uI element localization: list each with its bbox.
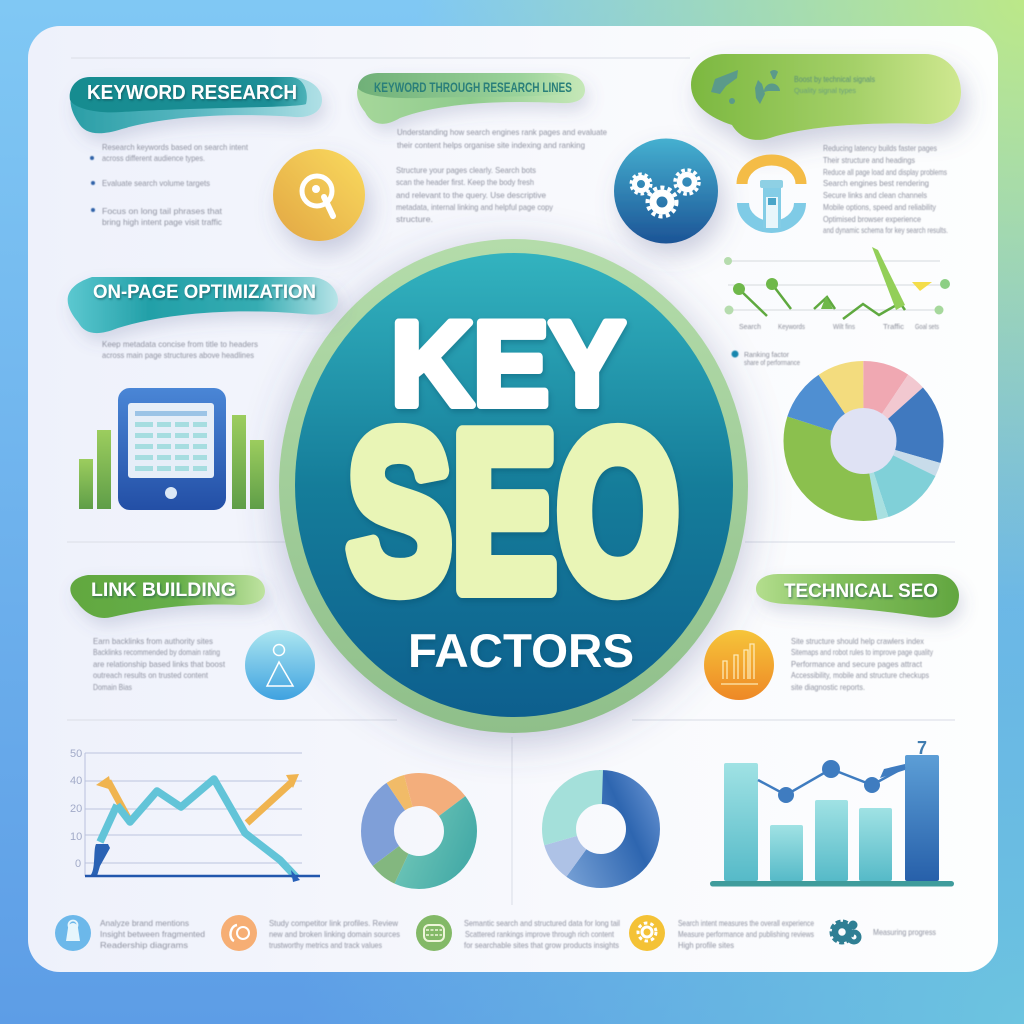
text block: metadata, internal linking and helpful page copy <box>396 203 554 212</box>
panel: technical seo <box>704 574 959 700</box>
chart axis labels: Traffic <box>883 324 905 331</box>
text block: right column <box>823 144 948 235</box>
chart top number: 7 <box>917 738 927 758</box>
bullet list: Focus on long tail phrases that <box>102 207 223 216</box>
footer item 4: Search intent measures the overall experience <box>678 919 814 928</box>
text block: right column: Mobile options, speed and reliability <box>823 203 937 212</box>
axis numbers: 10 <box>70 831 82 843</box>
panel: keyword research <box>70 77 365 241</box>
text block: outreach results on trusted content <box>93 671 209 680</box>
text block: Structure your pages clearly. Search bots <box>396 166 536 175</box>
footer item 1: Readership diagrams <box>100 941 188 950</box>
heading pill: guidelines <box>357 73 585 124</box>
footer item 3: Semantic search and structured data for long tail <box>464 919 620 928</box>
footer item 5: Measuring progress <box>873 928 936 937</box>
text block: Keep metadata concise from title to headers <box>102 340 258 349</box>
base line <box>85 875 320 877</box>
footer item 2 <box>221 915 400 951</box>
footer item 2: new and broken linking domain sources <box>269 930 400 939</box>
bullet list: Research keywords based on search intent <box>102 143 249 152</box>
text block: their content helps organise site indexing and ranking <box>397 141 585 150</box>
central title badge <box>279 239 748 733</box>
pie chart <box>807 384 920 498</box>
heading pill: link building <box>70 575 265 618</box>
chart axis labels: Search <box>739 324 761 331</box>
text block: site diagnostic reports. <box>791 683 865 692</box>
footer item 4: High profile sites <box>678 941 734 950</box>
footer item 4: Measure performance and publishing reviews <box>678 930 814 939</box>
outer ring <box>279 239 748 733</box>
text block: Site structure should help crawlers index <box>791 637 924 646</box>
inner disc <box>295 253 733 717</box>
text block: right column: Optimised browser experience <box>823 215 921 224</box>
callout pill <box>691 54 961 140</box>
text block: and relevant to the query. Use descriptive <box>396 191 546 200</box>
panel: green callout <box>691 54 961 140</box>
footer item 5 <box>831 920 936 943</box>
heading pill: technical seo: TECHNICAL SEO <box>784 580 938 602</box>
text block: Sitemaps and robot rules to improve page quality <box>791 648 934 657</box>
heading pill: on-page optimization: ON-PAGE OPTIMIZATION <box>93 282 316 303</box>
text block: right column: and dynamic schema for key search results. <box>823 226 948 235</box>
bar chart with line <box>710 738 954 886</box>
footer item 1: Insight between fragmented <box>100 930 205 939</box>
bullet list: Evaluate search volume targets <box>102 179 210 188</box>
heading pill: keyword research <box>70 77 322 133</box>
chart axis labels: Keywords <box>778 324 805 331</box>
panel: link building <box>70 575 315 700</box>
icon: tower emblem <box>742 160 801 228</box>
heading pill: on-page optimization <box>68 277 338 333</box>
orange trend <box>108 781 292 823</box>
text block: across main page structures above headlines <box>102 351 254 360</box>
footer item 2: trustworthy metrics and track values <box>269 941 382 950</box>
text block: Accessibility, mobile and structure checkups <box>791 671 929 680</box>
footer item 1 <box>55 915 205 951</box>
pie legend: Ranking factor <box>744 352 790 359</box>
icon: rising bars <box>704 630 774 700</box>
text block: right column: Secure links and clean channels <box>823 191 927 200</box>
text block: structure. <box>396 215 433 224</box>
footer item 3: for searchable sites that grow products insights <box>464 941 619 950</box>
icon: tablet with bars <box>79 388 264 510</box>
text block: Understanding how search engines rank pages and evaluate <box>397 128 607 137</box>
bullet list: bring high intent page visit traffic <box>102 218 222 227</box>
text block: Earn backlinks from authority sites <box>93 637 213 646</box>
axis numbers: 20 <box>70 803 82 815</box>
chart axis labels: Wilt fins <box>833 324 855 331</box>
teal trend <box>100 779 297 878</box>
text block <box>102 340 258 360</box>
icon: link peak <box>245 630 315 700</box>
panel: green callout: Quality signal types <box>794 86 856 95</box>
line chart: lower left <box>70 748 320 882</box>
bullet list: across different audience types. <box>102 154 205 163</box>
text block <box>93 637 226 692</box>
footer item 1: Analyze brand mentions <box>100 919 189 928</box>
title: FACTORS: FACTORS <box>408 624 634 677</box>
heading pill: keyword research: KEYWORD RESEARCH <box>87 82 297 104</box>
heading pill: link building: LINK BUILDING <box>91 579 236 601</box>
pie legend <box>732 350 800 367</box>
panel: guidelines <box>357 73 607 224</box>
footer item 3: Scattered rankings improve through rich content <box>465 930 615 939</box>
blue marker <box>90 844 110 876</box>
divider lines <box>67 58 955 905</box>
footer row <box>55 915 936 951</box>
panel: on-page optimization <box>68 277 338 510</box>
title: KEY: KEY <box>391 297 625 431</box>
axis numbers: 40 <box>70 775 82 787</box>
text block: right column: Reducing latency builds faster pages <box>823 144 937 153</box>
footer item 3 <box>416 915 620 951</box>
axis numbers: 50 <box>70 748 82 760</box>
heading pill: technical seo <box>756 574 959 618</box>
text block <box>396 128 607 224</box>
bullet list <box>90 143 249 227</box>
icon: small map shapes <box>711 70 780 104</box>
axis numbers: 0 <box>75 858 81 870</box>
text block: right column: Reduce all page load and display problems <box>823 168 947 177</box>
axis numbers <box>70 748 82 870</box>
donut chart: center <box>559 787 643 871</box>
donut chart: left <box>378 790 460 872</box>
text block: scan the header first. Keep the body fresh <box>396 178 534 187</box>
text block: Backlinks recommended by domain rating <box>93 648 220 657</box>
text block: right column: Search engines best rendering <box>823 179 929 188</box>
chart axis labels: Goal sets <box>915 324 939 331</box>
title: SEO: SEO <box>347 385 679 637</box>
footer item 4 <box>629 915 814 951</box>
footer item 2: Study competitor link profiles. Review <box>269 919 398 928</box>
icon: gears circle <box>614 138 718 244</box>
text block: Performance and secure pages attract <box>791 660 923 669</box>
text block: right column: Their structure and headings <box>823 156 915 165</box>
grid and axes <box>85 753 302 863</box>
heading pill: guidelines: KEYWORD THROUGH RESEARCH LINES <box>374 79 572 95</box>
text block: Domain Bias <box>93 683 132 692</box>
callout text: Boost by technical signals <box>794 75 875 84</box>
line chart: upper right <box>724 247 950 331</box>
text block <box>791 637 934 692</box>
pie legend: share of performance <box>744 360 800 367</box>
text block: are relationship based links that boost <box>93 660 226 669</box>
chart axis labels <box>739 324 939 331</box>
icon: magnifier <box>273 149 365 241</box>
